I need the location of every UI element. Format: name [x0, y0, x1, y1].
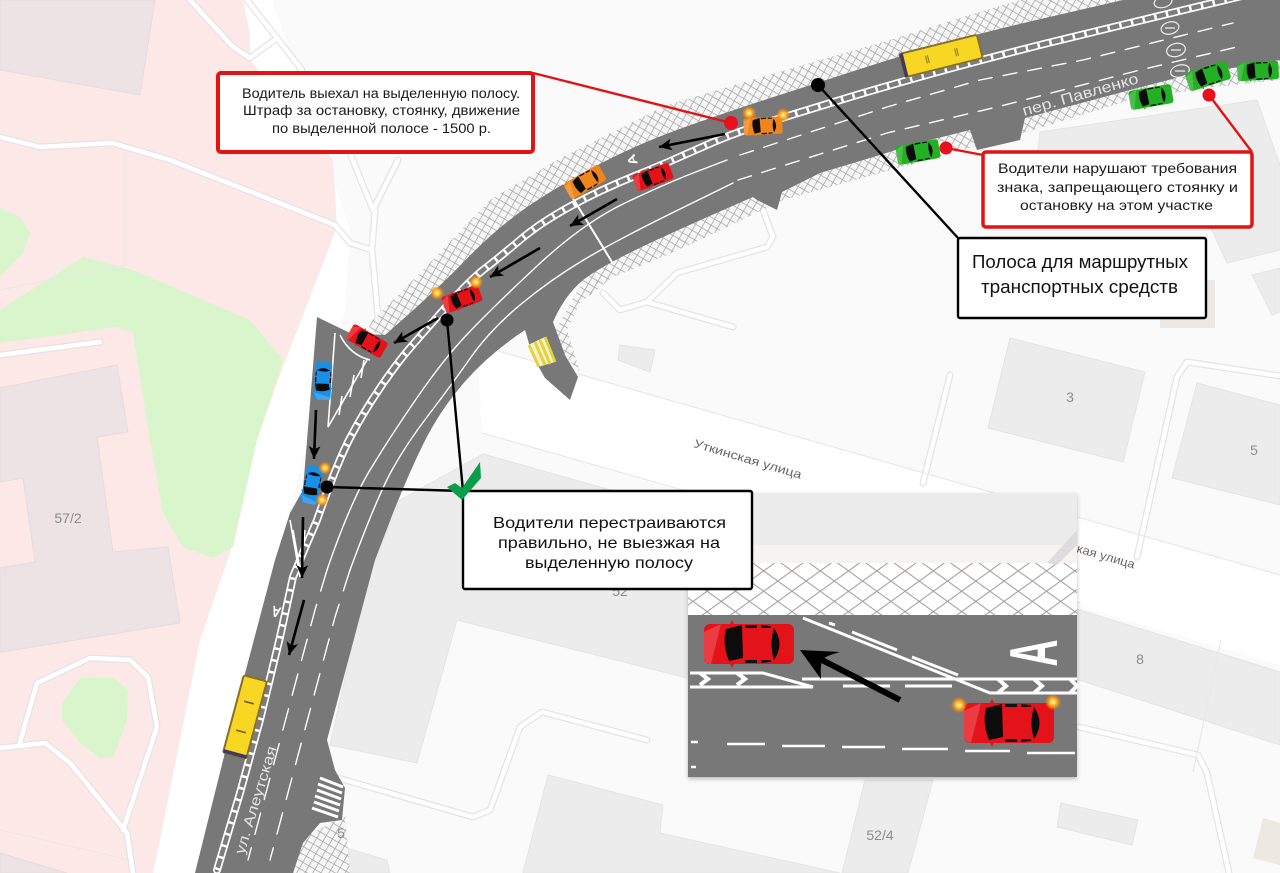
street name fragment right of inset: кая улица: [1075, 541, 1137, 572]
building numbers: 5: [337, 825, 345, 841]
inset close-up: [688, 493, 1077, 777]
callout: correct lane change: выделенную полосу: [525, 555, 693, 572]
callout: no parking sign: остановку на этом участке: [1020, 197, 1213, 213]
street name: Utkinskaya: Уткинская улица: [692, 436, 804, 482]
pink zone buildings: [0, 0, 180, 873]
red car in lane: [631, 161, 675, 193]
yellow crossing: [528, 337, 555, 367]
building numbers: 8: [1136, 651, 1144, 667]
callout: bus lane: транспортных средств: [981, 277, 1178, 297]
building numbers: 5: [1250, 442, 1258, 458]
grey buildings: [325, 100, 1280, 873]
buses: [223, 35, 983, 759]
bus bottom: [223, 675, 267, 759]
pink district: [0, 0, 337, 873]
inset car left: [704, 620, 794, 668]
leader dots: [320, 78, 1216, 494]
lane letter A upper: А: [624, 152, 640, 167]
callout: correct lane change: правильно, не выезжая на: [498, 535, 720, 552]
bay markings: [290, 333, 370, 577]
green areas: [0, 208, 283, 758]
inset arrow: [800, 650, 900, 700]
direction arrows: [289, 134, 725, 655]
building numbers: 3: [1066, 389, 1074, 405]
lane letter A lower: А: [269, 602, 283, 622]
building numbers: 52: [612, 583, 628, 599]
icon: green check mark: [447, 462, 481, 500]
callout: lane violation fine: по выделенной полосе - 1500 р.: [272, 121, 491, 136]
callout: lane violation fine: Водитель выехал на выделенную полосу.: [242, 86, 520, 101]
blue car lit: [298, 462, 332, 506]
building numbers: 52/4: [866, 827, 894, 843]
callout: bus lane: Полоса для маршрутных: [972, 252, 1188, 272]
road symbols: [1153, 0, 1191, 79]
stop line: [563, 182, 612, 262]
building numbers: [54, 389, 1258, 843]
green parked cars: [895, 58, 1279, 167]
orange car lit: [742, 106, 790, 137]
callout: lane violation fine: Штраф за остановку, стоянку, движение: [243, 103, 520, 118]
callout: correct lane change: Водители перестраиваются: [493, 515, 726, 532]
bus top: [899, 35, 983, 77]
callout: no parking sign: Водители нарушают требования: [998, 160, 1237, 176]
blue car: [312, 362, 334, 400]
hatched sidewalks: [290, 0, 1280, 873]
zebra crossing: [312, 778, 343, 817]
orange car: [562, 163, 608, 201]
callout: no parking sign: знака, запрещающего стоянку и: [997, 179, 1238, 195]
lane lines: [248, 23, 1237, 860]
callout: correct lane change: [463, 491, 752, 589]
building numbers: 57/2: [54, 510, 82, 526]
leader lines: [327, 73, 1252, 491]
callout: bus lane: [958, 238, 1206, 318]
inset car right: [951, 694, 1061, 747]
inset letter A: А: [995, 639, 1072, 667]
red car lit: [430, 275, 484, 315]
callout: lane violation fine: [218, 73, 533, 152]
street name: Aleutskaya: ул. Алеутская: [233, 744, 281, 856]
street name: Pavlenko: пер. Павленко: [1020, 70, 1140, 120]
red car at bay: [345, 322, 389, 360]
inset markings: [690, 618, 1077, 767]
violating and correct cars: [298, 58, 1279, 507]
callout: no parking sign: [983, 152, 1252, 227]
